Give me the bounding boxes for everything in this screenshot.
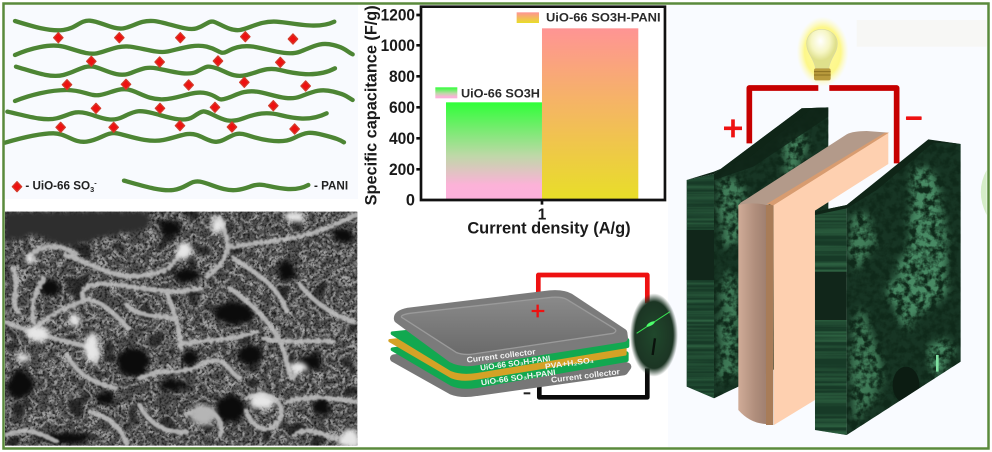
y axis tick labels: 200	[389, 161, 415, 179]
x axis title: Current density (A/g)	[467, 218, 631, 237]
legend: UiO-66 SO3: 3	[90, 185, 94, 194]
y axis tick labels: 0	[406, 192, 415, 210]
y axis tick labels: 1000	[381, 37, 415, 55]
wire: dark red circuit	[749, 88, 897, 163]
layer: top current collector	[398, 294, 624, 362]
layer labels: UiO-66 SO₃H-PANI	[480, 368, 556, 387]
electrode: right	[815, 139, 962, 437]
negative sign	[906, 116, 922, 120]
UiO-66 SO3 diamonds	[54, 32, 310, 134]
faint grey patch	[857, 20, 987, 47]
x tick label: 1	[538, 206, 547, 223]
bar: UiO-66 SO3H	[446, 102, 542, 200]
chart axes frame	[416, 7, 665, 205]
y axis tick labels	[381, 7, 415, 210]
negative sign	[524, 392, 530, 394]
layer labels: UiO-66 SO₃H-PANI	[480, 354, 551, 373]
electrode: left	[687, 107, 829, 400]
SEM bright spots	[17, 212, 360, 448]
SEM smooth dark region	[5, 212, 150, 247]
faint green glow	[981, 170, 987, 215]
layer: bottom current collector	[394, 340, 627, 393]
layer: lower electrode	[393, 327, 627, 387]
device: electrochemical cell with bulb	[687, 17, 987, 437]
legend: PANI: - PANI	[314, 180, 348, 193]
layer labels	[466, 347, 620, 387]
wire: red positive	[538, 275, 647, 303]
wire: black negative	[539, 368, 647, 397]
y axis tick labels: 600	[389, 99, 415, 117]
SEM dark pores	[7, 220, 353, 444]
device: pouch supercapacitor stack	[390, 275, 678, 397]
positive sign	[724, 119, 742, 137]
layer labels: PVA+H₂SO₄	[544, 355, 595, 371]
legend: UiO-66 SO3	[12, 179, 97, 194]
legend: PANI	[124, 180, 348, 193]
separator membrane	[738, 131, 889, 425]
panel: right device background	[668, 4, 987, 447]
legend: UiO-66 SO3H-PANI: UiO-66 SO3H-PANI	[546, 10, 661, 24]
legend: UiO-66 SO3: - UiO-66 SO	[25, 180, 90, 193]
SEM fibres	[5, 215, 357, 445]
y axis tick labels: 800	[389, 68, 415, 86]
bar: UiO-66 SO3H-PANI	[542, 28, 638, 200]
layer labels: Current collector	[466, 347, 536, 365]
panel: SEM micrograph	[5, 212, 360, 448]
icon: light bulb	[797, 17, 849, 87]
icon: LED	[630, 293, 678, 377]
legend: UiO-66 SO3H: UiO-66 SO3H	[461, 86, 540, 100]
panel: PANI chain schematic	[4, 4, 358, 199]
legend: UiO-66 SO3: -	[94, 179, 97, 188]
y axis tick labels: 400	[389, 130, 415, 148]
positive sign	[532, 305, 544, 317]
y axis title: Specific capacitance (F/g)	[362, 5, 381, 205]
layer: upper electrode	[393, 317, 627, 372]
bar chart: specific capacitance	[362, 5, 665, 237]
layer labels: Current collector	[550, 367, 620, 385]
top plate face	[401, 297, 616, 354]
y axis tick labels: 1200	[381, 7, 415, 25]
PANI chains	[5, 21, 353, 143]
layer: PVA electrolyte	[390, 323, 625, 379]
